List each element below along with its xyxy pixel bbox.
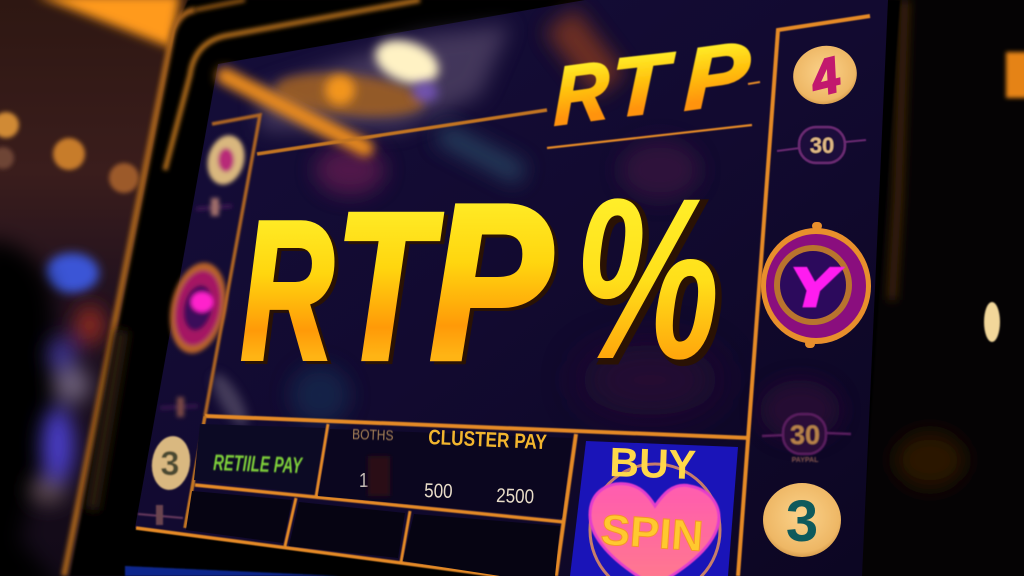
pill: 30 [777, 127, 866, 163]
coin: small 3: 3 [161, 445, 179, 483]
buy label: BUY [609, 439, 697, 488]
small RTP heading [554, 23, 750, 143]
coin: 4: 4 [804, 46, 846, 108]
table text [213, 426, 547, 508]
letters: R [241, 182, 333, 401]
right column icons [761, 39, 871, 557]
letters [241, 159, 552, 405]
right column line [738, 16, 870, 576]
table cells [186, 424, 572, 576]
ring: Y: Y [790, 257, 842, 318]
buy spin button [570, 439, 738, 576]
bokeh lights [0, 112, 139, 193]
pill: 30: 30 [810, 133, 834, 158]
value: 500: 500 [424, 479, 453, 502]
title divider left [257, 110, 547, 154]
letter shadows: T [340, 173, 446, 405]
coin: 3 [763, 483, 841, 557]
percent sign: % [574, 151, 720, 408]
big RTP % [241, 151, 724, 411]
small RTP heading: R [554, 43, 609, 143]
heart [590, 484, 719, 576]
table header: cluster pay: CLUSTER PAY [428, 427, 547, 455]
small marker [138, 505, 183, 525]
ring [162, 257, 234, 359]
green label: RETIILE PAY [213, 450, 304, 478]
letters: T [336, 170, 442, 402]
table lines [205, 416, 750, 438]
left column lines [205, 115, 260, 416]
coin: small 4 [202, 131, 250, 189]
small pill [196, 198, 232, 216]
lower blurred lights [30, 305, 105, 504]
small pill lower [160, 397, 198, 417]
value: 2500: 2500 [496, 484, 534, 508]
ring: Y [761, 222, 871, 348]
ceiling amber light streak [35, 0, 180, 48]
letter shadows [245, 154, 724, 411]
letters: P [430, 159, 552, 405]
frame lines [136, 16, 870, 576]
value: 1: 1 [359, 469, 368, 491]
spin label: SPIN [599, 506, 705, 561]
screen [135, 0, 888, 576]
small RTP heading: T [612, 35, 675, 135]
letter shadows: R [245, 185, 337, 404]
blue light [45, 253, 99, 293]
left column icons [160, 131, 250, 417]
coin: 4 [787, 39, 863, 112]
screen reflections [206, 20, 840, 440]
table header small: BOTHS [352, 426, 394, 444]
title underline [547, 125, 752, 148]
right side lights [1006, 52, 1024, 98]
small RTP heading: P [684, 23, 750, 129]
letter shadows: % [578, 154, 724, 411]
bottom blue strip [125, 566, 340, 576]
coin: 3: 3 [786, 489, 818, 554]
pill: 30 lower: 30 [790, 420, 820, 450]
foreground silhouette [0, 240, 62, 576]
letter shadows: P [434, 162, 556, 408]
pill: 30 lower [762, 414, 851, 464]
pill: 30 lower: PAYPAL [792, 457, 819, 464]
coin: small 3 [148, 434, 194, 492]
